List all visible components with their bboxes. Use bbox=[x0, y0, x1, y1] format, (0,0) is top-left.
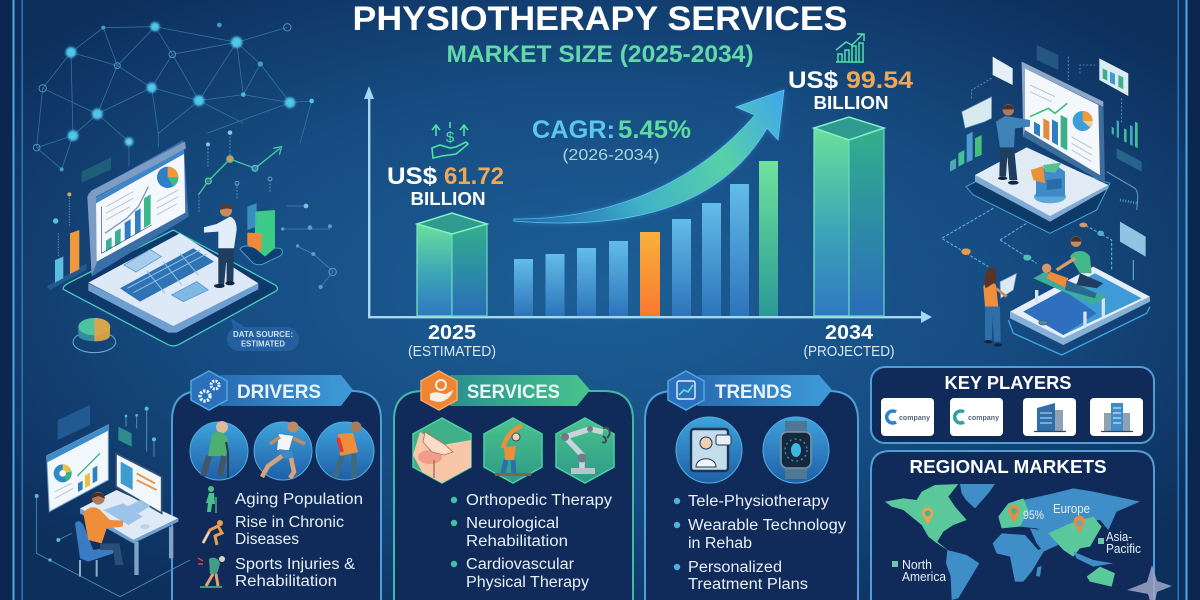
pie on pedestal bbox=[1031, 163, 1066, 203]
region labels bbox=[892, 502, 1141, 584]
chart axes bbox=[364, 86, 932, 323]
region labels: Asia- bbox=[1106, 530, 1132, 544]
axis labels: 2034 bbox=[825, 322, 874, 344]
2034 value: US$ bbox=[788, 67, 839, 94]
south america bbox=[946, 550, 979, 600]
icon: robotic arm bbox=[556, 418, 614, 483]
axis labels: (ESTIMATED) bbox=[408, 344, 496, 360]
icon: growth chart bbox=[836, 34, 864, 62]
2034 column bbox=[814, 117, 884, 316]
icon: back pain bbox=[316, 422, 374, 480]
platform and monitor bbox=[966, 62, 1110, 233]
CAGR label: 5.45% bbox=[618, 116, 691, 144]
desk bbox=[80, 490, 178, 575]
network nodes bbox=[33, 22, 314, 171]
connector paths bbox=[942, 208, 1146, 280]
network lines bbox=[37, 27, 312, 169]
panel: drivers bbox=[172, 371, 381, 600]
australia bbox=[1087, 567, 1115, 587]
region labels: America bbox=[902, 570, 946, 584]
side bars and label tag bbox=[47, 157, 111, 290]
greenland bbox=[960, 484, 995, 508]
list item: chronic diseases bbox=[203, 514, 344, 548]
2025 value: 61.72 bbox=[444, 163, 504, 190]
panel frame bbox=[172, 391, 381, 600]
middle east bbox=[1030, 528, 1058, 552]
heading ribbon bbox=[450, 375, 590, 406]
logo: company two bbox=[950, 398, 1003, 436]
logo: company one: company bbox=[899, 413, 931, 422]
data source callout bbox=[227, 318, 299, 351]
chart cards bbox=[950, 45, 1142, 210]
list item: sports injuries: Sports Injuries & bbox=[235, 556, 356, 573]
2025 value bbox=[387, 163, 504, 209]
CAGR label: CAGR: bbox=[532, 116, 615, 144]
icon: smart watch bbox=[763, 417, 829, 483]
service list bbox=[451, 492, 612, 591]
data source callout: DATA SOURCE: bbox=[233, 329, 293, 339]
heading ribbon bbox=[697, 375, 832, 406]
yearly bars bbox=[514, 161, 778, 316]
service list: Rehabilitation bbox=[466, 533, 568, 550]
region labels: 95% bbox=[1023, 510, 1044, 522]
2034 value: BILLION bbox=[814, 93, 888, 113]
africa bbox=[993, 533, 1047, 582]
service list: Orthopedic Therapy bbox=[466, 492, 612, 509]
treatment tablet bbox=[1008, 267, 1150, 355]
CAGR label: (2026-2034) bbox=[562, 147, 660, 164]
icon: caring hand bbox=[421, 371, 457, 410]
growth arrow bbox=[514, 90, 784, 223]
list item: aging population: Aging Population bbox=[235, 491, 363, 508]
heading text: TRENDS bbox=[715, 382, 792, 403]
heading: REGIONAL MARKETS bbox=[910, 457, 1106, 477]
panel frame bbox=[871, 367, 1154, 443]
panel frame bbox=[645, 391, 858, 600]
logo: company one bbox=[881, 398, 934, 436]
list item: sports injuries: Rehabilitation bbox=[235, 573, 337, 590]
illustration: analyst and therapy session bbox=[942, 45, 1150, 355]
trend list: Personalized bbox=[688, 559, 782, 576]
heading text: SERVICES bbox=[467, 382, 560, 403]
icon: aging person bbox=[190, 421, 248, 480]
panel: regional markets bbox=[871, 451, 1154, 600]
asia bbox=[1020, 488, 1140, 537]
database disc bbox=[73, 318, 116, 353]
standing woman with laptop bbox=[983, 268, 1017, 347]
icon: sparkle watermark bbox=[1127, 565, 1172, 600]
islands bbox=[1073, 552, 1113, 567]
axis labels: 2025 bbox=[428, 322, 476, 344]
floating stack chart bbox=[240, 203, 336, 289]
icon: tele-physio tablet bbox=[676, 417, 742, 483]
madagascar bbox=[1036, 566, 1042, 577]
axis labels: (PROJECTED) bbox=[804, 344, 894, 360]
bar chart: market size bbox=[364, 67, 932, 360]
icon: trend chart bbox=[668, 371, 704, 410]
panel: key players bbox=[871, 367, 1154, 443]
logo: company two: company bbox=[968, 413, 1000, 422]
patient and therapist bbox=[1042, 236, 1103, 298]
panel: trends bbox=[645, 371, 858, 600]
service list: Physical Therapy bbox=[466, 574, 589, 591]
list item: chronic diseases: Rise in Chronic bbox=[235, 514, 344, 531]
icon: money in hand: $ bbox=[446, 129, 455, 146]
2034 value: 99.54 bbox=[846, 67, 914, 94]
trend list: Treatment Plans bbox=[688, 576, 808, 593]
list item: sports injuries bbox=[198, 556, 356, 590]
2025 value: BILLION bbox=[410, 189, 486, 209]
trend list: Tele-Physiotherapy bbox=[688, 493, 829, 510]
2034 value bbox=[788, 67, 914, 113]
logo: office building two bbox=[1090, 398, 1143, 436]
panel: services bbox=[394, 371, 633, 600]
heading ribbon bbox=[220, 375, 353, 406]
region labels: Pacific bbox=[1106, 542, 1141, 556]
icon: money in hand bbox=[432, 122, 468, 158]
icon: hand on back bbox=[413, 418, 471, 483]
south asia bbox=[1048, 517, 1102, 557]
market analysis tag bbox=[58, 405, 132, 447]
presenter figure bbox=[996, 104, 1030, 185]
service list: Cardiovascular bbox=[466, 556, 574, 573]
title: PHYSIOTHERAPY SERVICES bbox=[352, 0, 848, 38]
seated figure bbox=[75, 492, 123, 577]
list item: aging population bbox=[206, 486, 363, 513]
trend list bbox=[674, 493, 846, 593]
region labels: North bbox=[902, 558, 932, 572]
dashboard screens bbox=[47, 425, 162, 529]
europe bbox=[998, 498, 1028, 528]
icon: gears bbox=[191, 371, 227, 410]
world map bbox=[885, 484, 1140, 600]
list item: chronic diseases: Diseases bbox=[235, 531, 299, 548]
illustration: data network and laptop analyst bbox=[33, 22, 336, 353]
analyst figure bbox=[204, 204, 237, 288]
icon: runner bbox=[254, 422, 312, 480]
CAGR label bbox=[532, 116, 691, 164]
service list: Neurological bbox=[466, 515, 559, 532]
heading text: DRIVERS bbox=[237, 382, 321, 403]
map pins bbox=[922, 505, 1085, 533]
region labels: Europe bbox=[1053, 502, 1090, 516]
floating trend line bbox=[198, 130, 282, 212]
circuit lines bbox=[35, 407, 190, 597]
north america bbox=[885, 484, 967, 551]
panel frame bbox=[394, 391, 633, 600]
trend list: in Rehab bbox=[688, 535, 752, 552]
2025 value: US$ bbox=[387, 163, 438, 190]
axis labels bbox=[408, 322, 894, 360]
illustration: desk analyst bbox=[35, 405, 190, 597]
subtitle: MARKET SIZE (2025-2034) bbox=[446, 41, 754, 68]
laptop bbox=[63, 140, 277, 346]
logo: office building one bbox=[1023, 398, 1076, 436]
heading: KEY PLAYERS bbox=[944, 373, 1072, 393]
2025 column bbox=[417, 213, 487, 316]
data source callout: ESTIMATED bbox=[241, 338, 285, 348]
icon: stretching figure bbox=[484, 418, 542, 483]
panel frame bbox=[871, 451, 1154, 600]
trend list: Wearable Technology bbox=[688, 517, 846, 534]
